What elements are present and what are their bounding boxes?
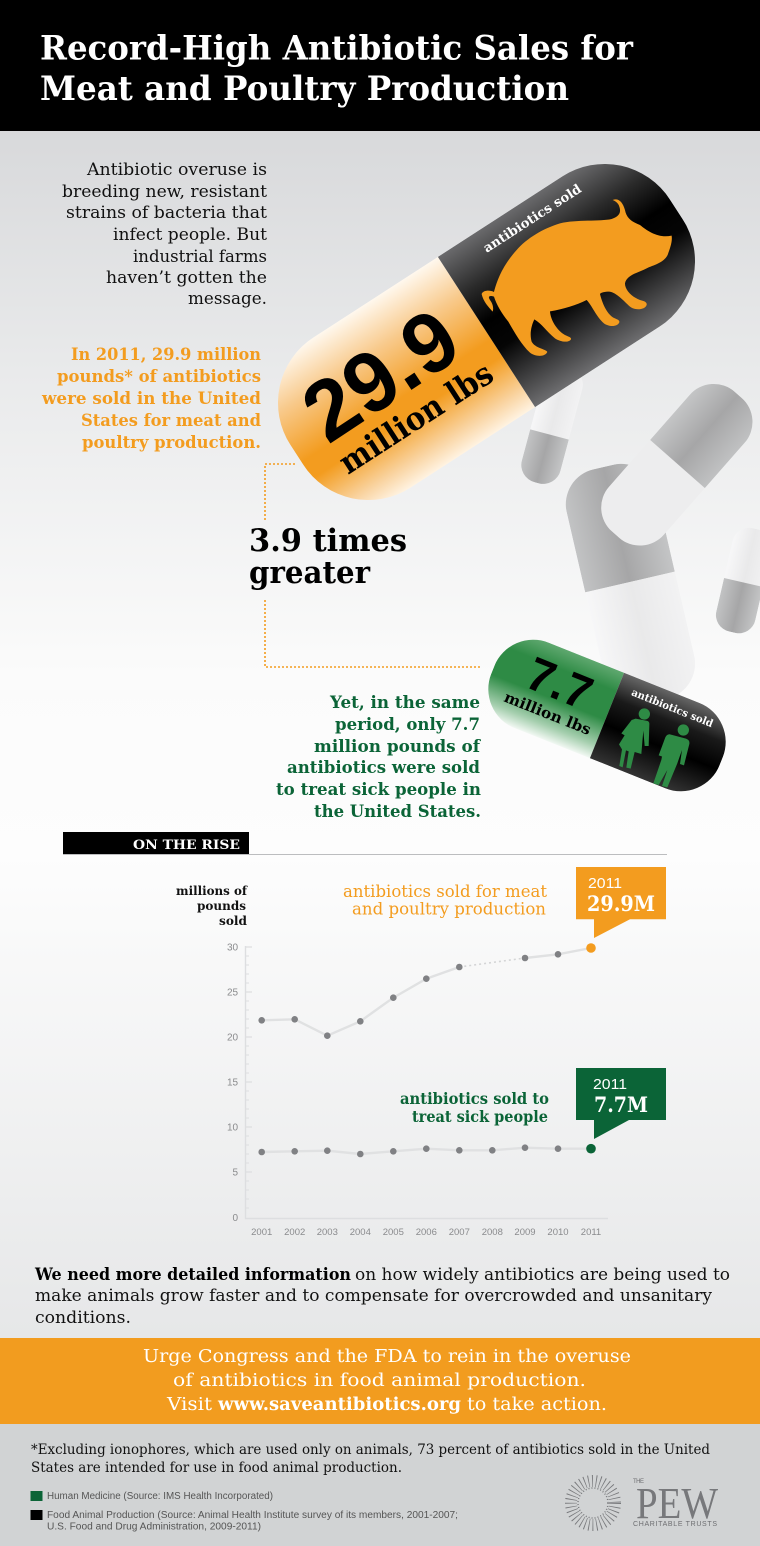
- call to action band: www.saveantibiotics.org: [217, 1395, 461, 1415]
- green statement text: the United States.: [314, 802, 481, 822]
- legend: food animal production: Food Animal Production (Source: Animal Health Institute survey of its members, 2001-2007;: [47, 1510, 458, 1521]
- x-axis labels: 2002: [284, 1227, 305, 1238]
- section heading: on the rise: ON THE RISE: [133, 838, 240, 853]
- legend: food animal production: [30, 1510, 458, 1532]
- intro text: message.: [188, 289, 267, 309]
- label: meat and poultry series: antibiotics sold for meat: [343, 882, 547, 901]
- y-axis labels: 20: [227, 1032, 239, 1044]
- unit label: million lbs: [502, 688, 594, 739]
- x-axis labels: 2009: [514, 1227, 536, 1238]
- unit label: million lbs: [332, 354, 500, 482]
- logo: Pew Charitable Trusts: CHARITABLE TRUSTS: [633, 1521, 717, 1528]
- title banner: [0, 0, 760, 131]
- label: meat and poultry series: and poultry production: [352, 900, 546, 918]
- intro text: haven’t gotten the: [106, 268, 267, 288]
- green statement text: period, only 7.7: [335, 715, 480, 735]
- series: human medicine: [258, 1144, 596, 1157]
- call to action band: to take action.: [467, 1395, 607, 1415]
- x-axis labels: 2001: [251, 1227, 272, 1238]
- x-axis labels: 2005: [383, 1227, 404, 1238]
- callout: 2011 7.7M: [576, 1068, 666, 1139]
- comparison heading: greater: [249, 555, 371, 591]
- x-axis labels: 2003: [317, 1227, 338, 1238]
- callout: 2011 7.7M: 2011: [593, 1076, 627, 1093]
- intro text: Antibiotic overuse is: [86, 160, 267, 180]
- conclusion text: make animals grow faster and to compensate for overcrowded and unsanitary: [35, 1286, 712, 1306]
- logo: Pew Charitable Trusts: PEW: [636, 1479, 718, 1528]
- x-axis labels: 2004: [350, 1227, 371, 1238]
- icon: pig: [482, 199, 672, 356]
- conclusion text: We need more detailed information: [34, 1265, 351, 1285]
- page background: [0, 131, 760, 1338]
- call to action band: [0, 1338, 760, 1424]
- footnote: States are intended for use in food animal production.: [31, 1460, 402, 1476]
- x-axis labels: 2006: [416, 1227, 437, 1238]
- label: sick people series: treat sick people: [412, 1107, 548, 1126]
- orange statement text: were sold in the United: [41, 389, 261, 409]
- dotted connector: [265, 464, 481, 667]
- callout: 2011 29.9M: 29.9M: [587, 891, 655, 916]
- logo: Pew Charitable Trusts: [571, 1479, 718, 1528]
- label: meat and poultry series: [343, 882, 547, 918]
- intro text: strains of bacteria that: [66, 203, 267, 223]
- legend: food animal production: U.S. Food and Drug Administration, 2009-2011): [47, 1522, 261, 1532]
- call to action band: of antibiotics in food animal production.: [173, 1371, 586, 1391]
- orange statement text: States for meat and: [81, 411, 261, 431]
- y-axis labels: 30: [227, 942, 239, 954]
- capsule label: antibiotics sold: antibiotics sold: [481, 182, 585, 256]
- title banner: Record-High Antibiotic Sales for: [40, 28, 634, 68]
- footer panel: [0, 1424, 760, 1546]
- x-axis labels: 2010: [547, 1227, 569, 1238]
- footnote: [31, 1442, 710, 1476]
- comparison heading: [249, 523, 407, 591]
- green statement text: Yet, in the same: [329, 693, 480, 713]
- axes: [245, 946, 608, 1218]
- y-axis labels: 25: [227, 988, 239, 998]
- label: sick people series: [400, 1089, 549, 1126]
- icon: woman: [619, 708, 650, 769]
- y-axis title: [176, 883, 249, 928]
- y-axis labels: 5: [232, 1168, 238, 1178]
- y-axis labels: 10: [227, 1122, 239, 1134]
- conclusion text: on how widely antibiotics are being used to: [355, 1265, 730, 1285]
- series: food animal production: [258, 943, 596, 1039]
- green statement text: to treat sick people in: [276, 780, 481, 800]
- orange statement text: pounds* of antibiotics: [57, 367, 261, 387]
- y-axis title: sold: [219, 913, 247, 928]
- big capsule: 29.9 million lbs: [278, 164, 695, 500]
- y-axis labels: 15: [227, 1078, 239, 1088]
- green statement text: antibiotics were sold: [287, 758, 480, 778]
- title banner: Meat and Poultry Production: [40, 69, 569, 109]
- y-axis labels: [227, 942, 239, 1224]
- orange statement text: poultry production.: [82, 433, 261, 453]
- call to action band: Visit: [166, 1395, 212, 1415]
- label: sick people series: antibiotics sold to: [400, 1089, 549, 1108]
- decorative pill: angled upper right: [601, 384, 752, 546]
- callout: 2011 29.9M: [576, 867, 666, 938]
- icon: sunburst: [571, 1481, 615, 1525]
- intro text: infect people. But: [113, 225, 267, 245]
- x-axis labels: 2007: [449, 1227, 470, 1238]
- intro text: [62, 160, 267, 309]
- number: 7.7: [519, 646, 600, 720]
- icon: man: [653, 724, 689, 787]
- conclusion text: conditions.: [35, 1308, 131, 1328]
- callout: 2011 7.7M: 7.7M: [594, 1092, 648, 1117]
- green statement text: million pounds of: [314, 737, 482, 757]
- green statement text: [276, 693, 482, 822]
- footnote: *Excluding ionophores, which are used only on animals, 73 percent of antibiotics sold in the United: [31, 1442, 710, 1458]
- y-axis title: millions of: [176, 883, 249, 898]
- capsule label: antibiotics sold: [630, 687, 715, 730]
- x-axis labels: [251, 1227, 601, 1238]
- y-axis title: pounds: [197, 898, 246, 913]
- decorative pill: large centre: [566, 464, 695, 694]
- x-axis labels: 2011: [581, 1227, 601, 1238]
- call to action band: Urge Congress and the FDA to rein in the overuse: [143, 1347, 631, 1367]
- intro text: industrial farms: [133, 247, 267, 267]
- orange statement text: In 2011, 29.9 million: [71, 345, 261, 365]
- x-axis labels: 2008: [482, 1227, 503, 1238]
- decorative pill: right edge: [716, 528, 760, 634]
- comparison heading: 3.9 times: [249, 523, 407, 559]
- line chart: [176, 867, 666, 1238]
- conclusion text: [34, 1265, 730, 1328]
- big number: 29.9: [286, 291, 476, 461]
- small capsule: 7.7 million lbs: [488, 640, 726, 792]
- callout: 2011 29.9M: 2011: [588, 875, 622, 892]
- legend: human medicine: Human Medicine (Source: IMS Health Incorporated): [47, 1491, 273, 1502]
- orange statement text: [41, 345, 261, 453]
- logo: Pew Charitable Trusts: THE: [633, 1479, 644, 1485]
- decorative pill: under big capsule: [521, 402, 569, 484]
- intro text: breeding new, resistant: [62, 182, 267, 202]
- y-axis labels: 0: [232, 1213, 238, 1224]
- section heading: on the rise: [63, 832, 667, 854]
